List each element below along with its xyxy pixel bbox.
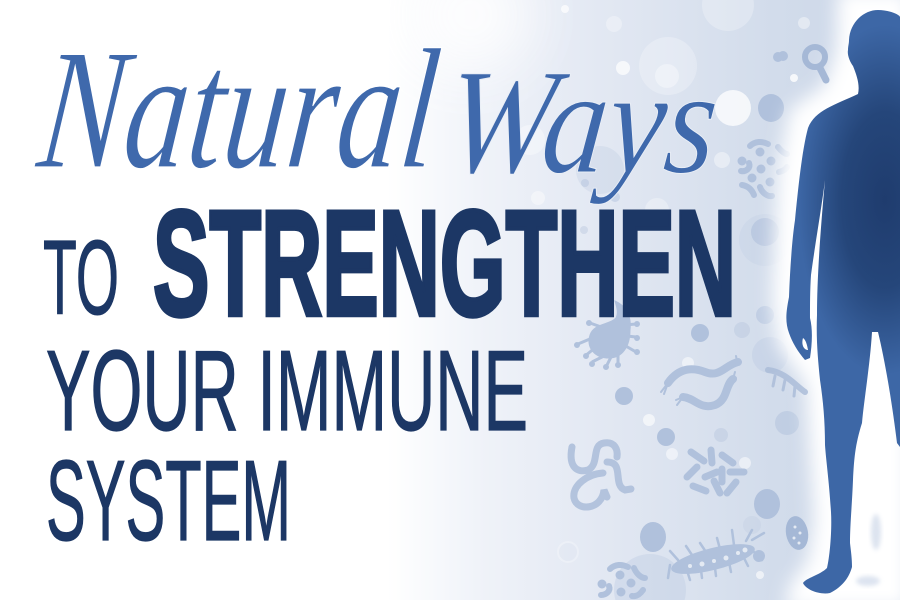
background microbes bbox=[515, 0, 810, 600]
rod bacteria cluster bbox=[687, 450, 744, 493]
script line: Natural Ways: Ways bbox=[439, 38, 726, 205]
solid circles bbox=[615, 51, 788, 562]
white halo around the figure bbox=[772, 0, 900, 600]
thumb gap on the hand bbox=[802, 338, 808, 350]
soft white glow at the top of the background bbox=[410, 0, 530, 70]
bacteria cluster, lower bbox=[598, 565, 645, 596]
human silhouette bbox=[786, 10, 900, 593]
pale large discs bbox=[559, 146, 799, 600]
bacteria cluster, upper bbox=[738, 142, 787, 196]
virus bbox=[574, 301, 640, 370]
heading: TO STRENGTHEN bbox=[43, 179, 736, 347]
faint shapes by the feet bbox=[856, 576, 880, 586]
tail-like microbe near the arm bbox=[768, 370, 805, 396]
microbes showing over the halo bbox=[768, 47, 826, 552]
squiggle worms bbox=[571, 443, 631, 507]
heading: TO STRENGTHEN: TO bbox=[43, 219, 119, 337]
pale mark beside the right leg bbox=[871, 514, 881, 550]
heading: YOUR IMMUNE: YOUR IMMUNE bbox=[46, 328, 528, 455]
ring microbe bbox=[805, 47, 826, 80]
title bbox=[30, 14, 736, 565]
flagellated worms bbox=[661, 356, 738, 406]
spiky bacterium bbox=[668, 530, 764, 580]
oval spotted microbe bbox=[783, 514, 811, 552]
script line: Natural Ways: Natural bbox=[30, 14, 448, 205]
heading: SYSTEM: SYSTEM bbox=[46, 438, 291, 565]
white bokeh circles bbox=[515, 0, 810, 579]
